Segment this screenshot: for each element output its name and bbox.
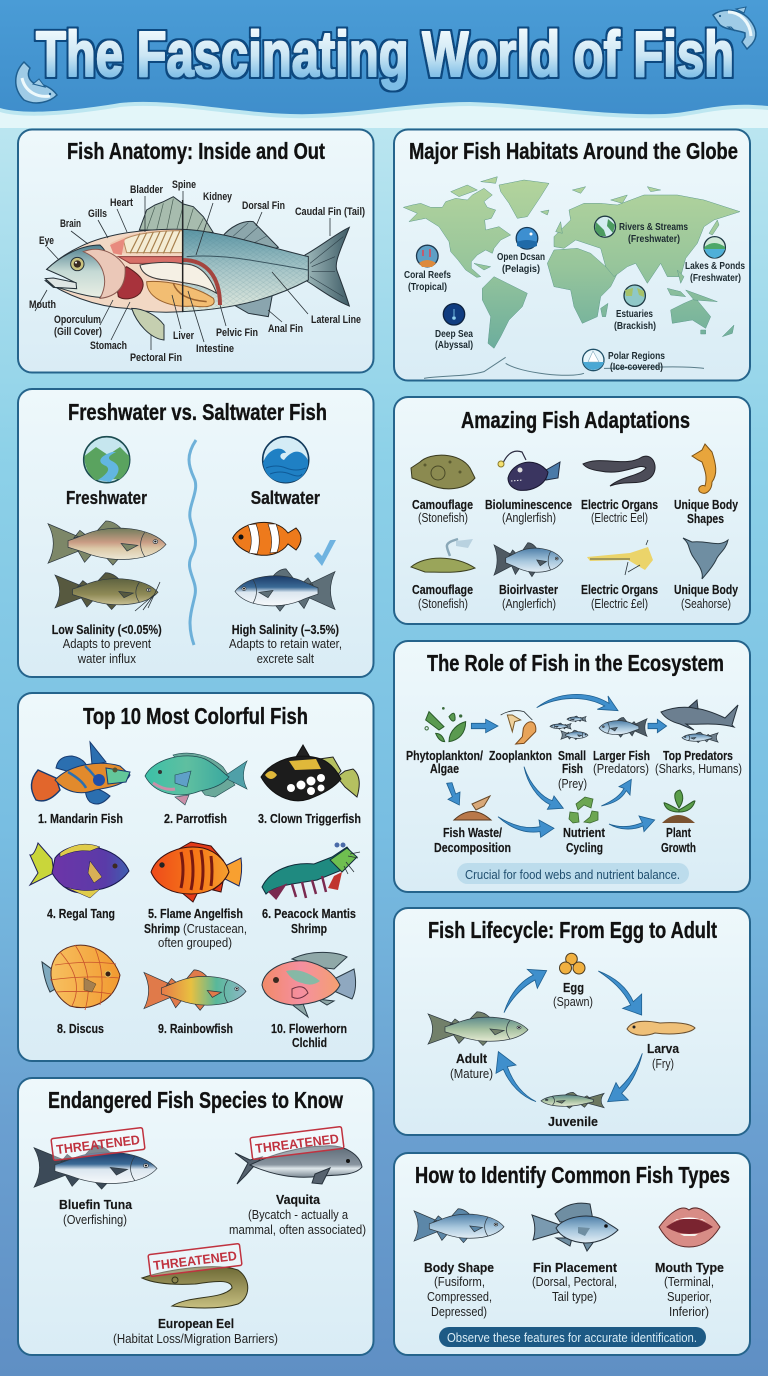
callout: identify: Observe these features for accurate identification. <box>447 1331 697 1345</box>
icon: lakes and ponds <box>704 237 725 258</box>
icon: open ocean <box>516 228 538 249</box>
labels: adaptations: (Stonefish) <box>418 511 468 525</box>
text: freshwater notes <box>52 622 162 666</box>
text: saltwater notes: excrete salt <box>257 652 314 666</box>
labels: habitats: (Abyssal) <box>435 339 473 351</box>
header band with wave <box>0 0 768 128</box>
labels: anatomy: Pelvic Fin <box>216 327 258 339</box>
text: saltwater notes: High Salinity (–3.5%) <box>232 622 339 637</box>
labels: colorful fish <box>38 811 361 1050</box>
labels: colorful fish: Shrimp <box>291 921 327 936</box>
labels: adaptations: Electric Organs <box>581 497 658 512</box>
labels: habitats: Rivers & Streams <box>619 221 688 233</box>
labels: habitats: (Freshwater) <box>690 272 741 284</box>
text: freshwater notes: Adapts to prevent <box>63 637 151 651</box>
labels: water types: Saltwater <box>251 488 320 508</box>
fish: tuna <box>235 569 335 611</box>
icon: body shape fish <box>414 1209 504 1243</box>
labels: colorful fish: 5. Flame Angelfish <box>148 906 243 921</box>
icon: mouth <box>659 1208 720 1247</box>
fish: parrotfish <box>145 753 247 805</box>
labels: endangered: Bluefin Tuna <box>59 1197 133 1212</box>
labels: colorful fish: Shrimp <box>144 921 180 936</box>
labels: water types: Freshwater <box>66 488 147 508</box>
icon: anglerfish <box>498 451 560 490</box>
labels: habitats: Open Dcsan <box>497 251 545 263</box>
wavy divider <box>189 440 196 645</box>
fish: bluefin tuna <box>34 1145 157 1189</box>
fish: clownfish <box>233 522 301 555</box>
labels: lifecycle: Juvenile <box>548 1114 598 1129</box>
icon: coral reefs <box>416 245 438 267</box>
labels: anatomy: Pectoral Fin <box>130 352 182 364</box>
labels: habitats: (Pelagis) <box>502 263 540 275</box>
fish: european eel <box>142 1267 248 1308</box>
icon: polar regions <box>583 349 604 371</box>
labels: identify <box>424 1260 724 1319</box>
labels: anatomy: Anal Fin <box>268 323 303 335</box>
labels: ecosystem: Fish <box>562 761 583 776</box>
labels: identify: Tail type) <box>552 1290 597 1304</box>
fish: clown triggerfish <box>261 745 359 801</box>
labels: anatomy: Bladder <box>130 184 164 196</box>
labels: identify: (Fusiform, <box>434 1275 485 1289</box>
heading: adaptations: Amazing Fish Adaptations <box>461 407 690 433</box>
panel: endangered species <box>18 1078 374 1355</box>
labels: anatomy: Brain <box>60 218 81 230</box>
labels: lifecycle: (Mature) <box>450 1067 493 1081</box>
icon: eggs <box>560 953 585 974</box>
labels: identify: Superior, <box>667 1290 712 1304</box>
labels: anatomy: Lateral Line <box>311 314 361 326</box>
panel: colorful fish <box>18 693 374 1061</box>
labels: anatomy: Heart <box>110 197 133 209</box>
labels: ecosystem: (Predators) <box>593 762 649 776</box>
labels: ecosystem: Small <box>558 748 586 763</box>
icon: seahorse silhouette <box>683 538 728 579</box>
icon: header fish left <box>16 62 57 103</box>
labels: lifecycle <box>450 980 680 1129</box>
labels: adaptations: Electric Organs <box>581 582 658 597</box>
labels: habitats: (Freshwater) <box>628 233 680 245</box>
shrimp: peacock mantis <box>262 842 360 898</box>
labels: anatomy: Caudal Fin (Tail) <box>295 206 365 218</box>
labels: endangered: (Habitat Loss/Migration Barriers) <box>113 1332 278 1346</box>
labels: habitats: Coral Reefs <box>404 269 451 281</box>
labels: habitats <box>404 221 745 373</box>
labels: anatomy: Dorsal Fin <box>242 200 285 212</box>
panel: freshwater vs saltwater <box>18 389 374 677</box>
icon: deep sea <box>443 304 465 325</box>
icon: larger fish <box>599 717 647 737</box>
callout: identify <box>439 1327 706 1347</box>
labels: ecosystem: Fish Waste/ <box>443 825 502 840</box>
panel: adaptations <box>394 397 750 624</box>
icon: small predator <box>682 732 718 743</box>
icon: wave <box>263 437 309 483</box>
labels: endangered: Vaquita <box>276 1192 321 1207</box>
labels: adaptations <box>412 497 739 611</box>
icon: zooplankton <box>501 711 536 744</box>
labels: anatomy: Spine <box>172 179 196 191</box>
labels: ecosystem: (Prey) <box>558 777 587 791</box>
fish: regal tang <box>30 843 129 898</box>
icon: plant <box>662 790 695 823</box>
labels: adaptations: Bioluminescence <box>485 497 572 512</box>
labels: adaptations: Unique Body <box>674 582 739 597</box>
labels: anatomy: Oporculum <box>54 314 101 326</box>
icon: seahorse <box>692 444 716 493</box>
labels: adaptations: (Seahorse) <box>681 597 731 611</box>
heading: anatomy: Fish Anatomy: Inside and Out <box>67 138 325 164</box>
labels: colorful fish: 3. Clown Triggerfish <box>258 811 361 826</box>
labels: lifecycle: Larva <box>647 1041 680 1056</box>
labels: adaptations: Camouflage <box>412 497 473 512</box>
labels: colorful fish: 10. Flowerhorn <box>271 1021 347 1036</box>
labels: endangered: European Eel <box>158 1316 234 1331</box>
flow arrows <box>447 694 667 837</box>
labels: ecosystem: Decomposition <box>434 840 511 855</box>
labels: adaptations: (Electric £el) <box>591 597 648 611</box>
labels: anatomy: Mouth <box>29 299 56 311</box>
text: saltwater notes <box>229 622 342 666</box>
icon: shark <box>661 700 738 730</box>
icon: recycle <box>569 797 598 823</box>
panel: fish anatomy <box>18 130 374 372</box>
labels: adaptations: (Electric Eel) <box>591 511 648 525</box>
labels: identify: Compressed, <box>427 1290 492 1304</box>
labels: identify: Fin Placement <box>533 1260 618 1275</box>
labels: adaptations: (Stonefish) <box>418 597 468 611</box>
callout: ecosystem <box>457 863 689 884</box>
icon: stonefish <box>411 455 475 489</box>
icon: rivers and streams <box>594 216 616 237</box>
icon: small fish <box>550 716 588 740</box>
diagram: fish cutaway <box>45 197 349 340</box>
world map <box>403 177 740 378</box>
labels: habitats: Deep Sea <box>435 328 473 340</box>
labels: anatomy: Stomach <box>90 340 127 352</box>
labels: identify: Mouth Type <box>655 1260 724 1275</box>
fish: rainbowfish <box>144 970 246 1010</box>
labels: lifecycle: Egg <box>563 980 584 995</box>
fish: flame angelfish <box>151 842 242 902</box>
icon: electric eel <box>583 456 655 486</box>
fish: discus <box>42 945 120 1010</box>
labels: anatomy: Eye <box>39 235 54 247</box>
stamp: european eel: THREATENED <box>152 1248 238 1273</box>
labels: ecosystem: Phytoplankton/ <box>406 748 483 763</box>
labels: anatomy: Kidney <box>203 191 233 203</box>
heading: endangered: Endangered Fish Species to Know <box>48 1087 343 1113</box>
labels: ecosystem <box>406 748 742 855</box>
icon: waste mound <box>454 796 491 820</box>
labels: endangered: (Overfishing) <box>63 1213 127 1227</box>
labels: ecosystem: (Sharks, Humans) <box>655 762 742 776</box>
text: saltwater notes: Adapts to retain water, <box>229 637 342 651</box>
labels: habitats: Lakes & Ponds <box>685 260 745 272</box>
icon: fin placement fish <box>532 1203 618 1251</box>
labels: endangered <box>59 1192 366 1346</box>
labels: adaptations: Shapes <box>687 511 724 526</box>
panel: ecosystem <box>394 641 750 892</box>
fish: mandarin <box>31 742 130 804</box>
icon: header fish right <box>713 7 756 49</box>
fish: catfish <box>55 573 160 611</box>
panel: identify fish types <box>394 1153 750 1355</box>
labels: ecosystem: Larger Fish <box>593 748 650 763</box>
labels: identify: Depressed) <box>431 1305 487 1319</box>
labels: anatomy: Intestine <box>196 343 234 355</box>
labels: ecosystem: Plant <box>666 825 692 840</box>
labels: colorful fish: Clchlid <box>292 1035 327 1050</box>
labels: habitats: (Ice-covered) <box>610 361 663 373</box>
callout: ecosystem: Crucial for food webs and nutrient balance. <box>465 868 680 882</box>
labels: colorful fish: 4. Regal Tang <box>47 906 115 921</box>
labels: colorful fish: 8. Discus <box>57 1021 104 1036</box>
labels: anatomy <box>29 179 365 364</box>
icon: algae <box>425 707 466 742</box>
icon: adult fish <box>428 1012 528 1046</box>
labels: water types <box>66 488 320 508</box>
labels: ecosystem: Zooplankton <box>489 748 552 763</box>
labels: ecosystem: Growth <box>661 840 696 855</box>
icon: check mark <box>314 540 336 566</box>
heading: freshwater vs saltwater: Freshwater vs. Saltwater Fish <box>68 399 327 425</box>
text: freshwater notes: Low Salinity (<0.05%) <box>52 622 162 637</box>
labels: identify: Body Shape <box>424 1260 494 1275</box>
labels: anatomy: Gills <box>88 208 107 220</box>
labels: identify: Inferior) <box>669 1305 709 1319</box>
stamp: bluefin tuna: THREATENED <box>55 1132 141 1157</box>
labels: habitats: Estuaries <box>616 308 653 320</box>
labels: adaptations: (Anglerfish) <box>502 511 556 525</box>
animal: vaquita <box>235 1146 362 1184</box>
icon: river <box>84 437 130 483</box>
panel: fish habitats <box>394 130 750 380</box>
labels: colorful fish: 1. Mandarin Fish <box>38 811 123 826</box>
labels: identify: (Dorsal, Pectoral, <box>532 1275 617 1289</box>
icon: juvenile <box>541 1092 604 1108</box>
labels: ecosystem: Nutrient <box>563 825 606 840</box>
labels: identify: (Terminal, <box>664 1275 714 1289</box>
labels: endangered: (Bycatch - actually a <box>248 1208 348 1222</box>
labels: habitats: Polar Regions <box>608 350 665 362</box>
text: freshwater notes: water influx <box>77 652 137 666</box>
labels: habitats: (Tropical) <box>408 281 447 293</box>
labels: anatomy: Liver <box>173 330 195 342</box>
labels: adaptations: Unique Body <box>674 497 739 512</box>
icon: camouflage fish <box>411 539 475 572</box>
leader lines <box>35 191 330 350</box>
labels: adaptations: (Anglerfich) <box>502 597 556 611</box>
labels: lifecycle: Adult <box>456 1051 488 1066</box>
icon: electric discharge <box>587 540 653 575</box>
labels: anatomy: (Gill Cover) <box>54 326 102 338</box>
labels: endangered: mammal, often associated) <box>229 1223 366 1237</box>
icon: larva <box>627 1021 695 1035</box>
labels: habitats: (Brackish) <box>614 320 656 332</box>
labels: colorful fish: (Crustacean, <box>183 922 247 936</box>
labels: adaptations: Bioirlvaster <box>499 582 558 597</box>
labels: ecosystem: Top Predators <box>663 748 733 763</box>
labels: colorful fish: 9. Rainbowfish <box>158 1021 233 1036</box>
labels: lifecycle: (Fry) <box>652 1057 674 1071</box>
labels: ecosystem: Cycling <box>566 840 603 855</box>
icon: silver fish <box>494 543 563 577</box>
labels: adaptations: Camouflage <box>412 582 473 597</box>
labels: colorful fish: 2. Parrotfish <box>164 811 227 826</box>
fish: flowerhorn cichlid <box>262 952 356 1017</box>
labels: lifecycle: (Spawn) <box>553 995 593 1009</box>
stamp: vaquita: THREATENED <box>254 1131 340 1156</box>
labels: ecosystem: Algae <box>430 761 459 776</box>
cycle arrows <box>496 969 642 1102</box>
panel: lifecycle <box>394 908 750 1135</box>
heading: colorful fish: Top 10 Most Colorful Fish <box>83 703 308 729</box>
labels: colorful fish: often grouped) <box>158 936 232 950</box>
icon: estuaries <box>624 285 645 306</box>
labels: colorful fish: 6. Peacock Mantis <box>262 906 356 921</box>
fish: trout <box>48 521 166 565</box>
